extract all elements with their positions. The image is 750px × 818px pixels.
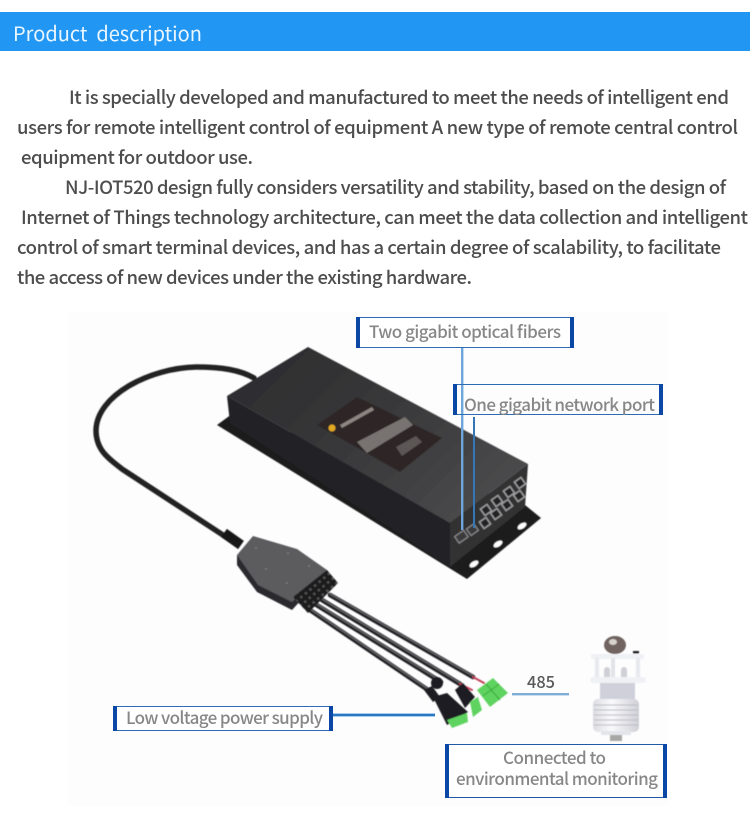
callout: One gigabit network port: One gigabit network port	[464, 391, 655, 416]
device: flange plate	[217, 414, 541, 579]
description text block: control of smart terminal devices, and has a certain degree of scalability, to facilitate	[17, 234, 721, 260]
callout line: optical fibers	[461, 348, 463, 530]
connectors: green terminals	[447, 678, 508, 728]
description text block: NJ-IOT520 design fully considers versatility and stability, based on the design of	[65, 174, 727, 200]
description text block: the access of new devices under the existing hardware.	[17, 264, 472, 290]
device: optical ports	[455, 524, 478, 543]
callout line: network port	[473, 417, 475, 528]
device: label plate	[317, 397, 442, 472]
description text block: Internet of Things technology architecture, can meet the data collection and intelligent	[21, 204, 749, 230]
product photo panel	[68, 312, 668, 806]
callout: Two gigabit optical fibers: Two gigabit optical fibers	[369, 318, 561, 343]
device: mounting plate holes	[468, 521, 528, 569]
callout: Connected to environmental monitoring: environmental monitoring	[456, 765, 658, 790]
header bar: Product description	[0, 12, 750, 51]
description text block: users for remote intelligent control of equipment A new type of remote central control	[17, 114, 738, 140]
description text block: It is specially developed and manufactured to meet the needs of intelligent end	[69, 84, 729, 110]
splitter hub	[237, 536, 338, 613]
splitter strain relief	[224, 533, 241, 545]
header bar: Product description: Product description	[13, 18, 202, 47]
sensor	[590, 636, 646, 741]
callout: Connected to environmental monitoring	[445, 744, 667, 798]
callout: Low voltage power supply: Low voltage power supply	[126, 704, 324, 729]
description text block: equipment for outdoor use.	[21, 144, 253, 170]
branch cables	[307, 594, 484, 690]
power cable	[96, 367, 254, 537]
device: RJ45 ports	[479, 477, 526, 529]
device: top face	[227, 347, 528, 523]
callout line: low voltage	[333, 713, 435, 717]
description text block	[17, 84, 749, 290]
device: long side face	[227, 396, 450, 567]
connectors: black housings	[424, 677, 475, 725]
485 label and line	[512, 668, 569, 695]
illustration: cables, hub and device	[96, 347, 646, 741]
485 label and line: 485	[527, 668, 555, 693]
callout: Connected to environmental monitoring: Connected to	[503, 744, 606, 769]
device: end face	[450, 464, 528, 567]
